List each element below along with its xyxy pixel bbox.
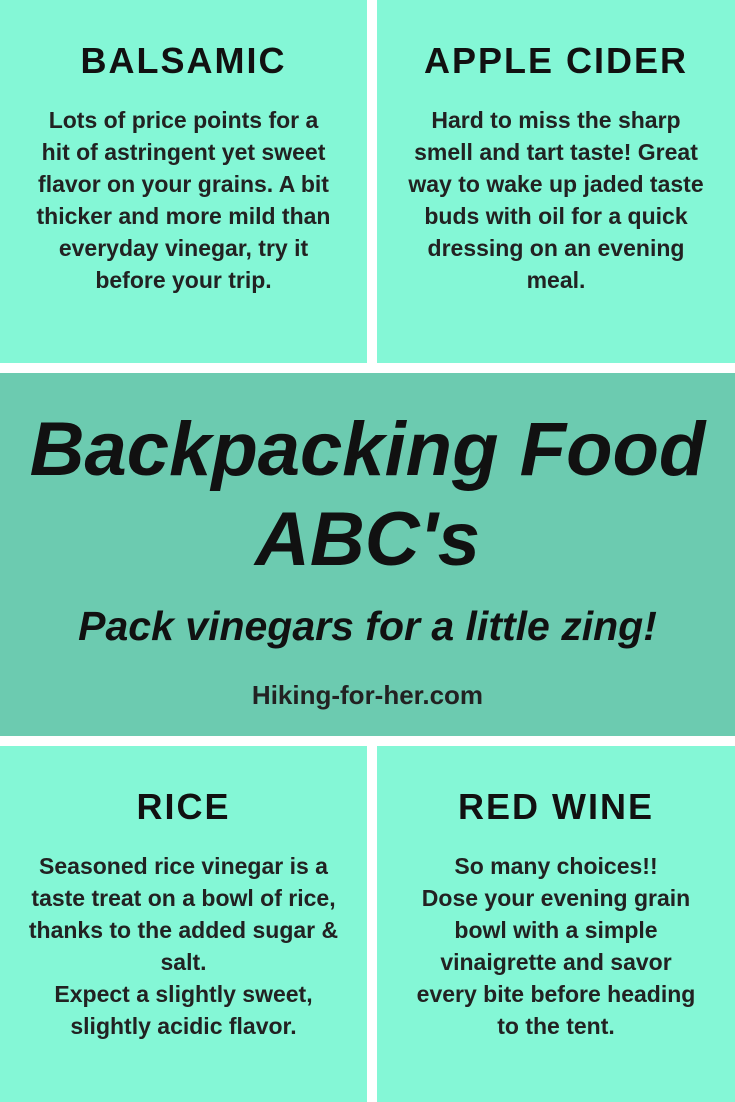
text: balsamic: everyday vinegar, try it xyxy=(59,235,308,261)
text: apple cider: smell and tart taste! Great xyxy=(414,139,698,165)
title xyxy=(30,407,707,582)
panel: rice xyxy=(0,746,367,1102)
text: balsamic: flavor on your grains. A bit xyxy=(38,171,329,197)
text: red wine: bowl with a simple xyxy=(454,917,658,943)
text: balsamic xyxy=(36,107,330,293)
heading: red wine: RED WINE xyxy=(458,786,654,827)
text: rice: thanks to the added sugar & xyxy=(29,917,338,943)
text: rice: taste treat on a bowl of rice, xyxy=(31,885,336,911)
text: apple cider: meal. xyxy=(527,267,585,293)
title: ABC's xyxy=(255,497,480,582)
text: balsamic: hit of astringent yet sweet xyxy=(42,139,325,165)
text: balsamic: thicker and more mild than xyxy=(37,203,330,229)
text: apple cider: buds with oil for a quick xyxy=(424,203,688,229)
text: rice xyxy=(29,853,338,1039)
text: red wine: So many choices!! xyxy=(454,853,658,879)
text: rice: slightly acidic flavor. xyxy=(70,1013,297,1039)
panel: title band xyxy=(0,373,735,736)
text: rice: Expect a slightly sweet, xyxy=(54,981,313,1007)
text: red wine: vinaigrette and savor xyxy=(440,949,672,975)
heading: rice: RICE xyxy=(136,786,230,827)
text: red wine: Dose your evening grain xyxy=(422,885,690,911)
text: apple cider: way to wake up jaded taste xyxy=(408,171,704,197)
panel: apple cider xyxy=(377,0,735,363)
text: apple cider: Hard to miss the sharp xyxy=(431,107,681,133)
text: apple cider xyxy=(408,107,704,293)
text: rice: Seasoned rice vinegar is a xyxy=(39,853,328,879)
text: red wine: every bite before heading xyxy=(417,981,695,1007)
text: red wine xyxy=(417,853,695,1039)
heading: balsamic: BALSAMIC xyxy=(80,40,286,81)
text: rice: salt. xyxy=(160,949,207,975)
text: apple cider: dressing on an evening xyxy=(428,235,684,261)
panel: balsamic xyxy=(0,0,367,363)
heading: apple cider: APPLE CIDER xyxy=(424,40,688,81)
text: balsamic: before your trip. xyxy=(95,267,272,293)
subtitle: Pack vinegars for a little zing! xyxy=(78,603,657,649)
text: red wine: to the tent. xyxy=(497,1013,615,1039)
title: Backpacking Food xyxy=(30,407,705,492)
text: balsamic: Lots of price points for a xyxy=(49,107,318,133)
panel: red wine xyxy=(377,746,735,1102)
website: Hiking-for-her.com xyxy=(252,680,483,710)
